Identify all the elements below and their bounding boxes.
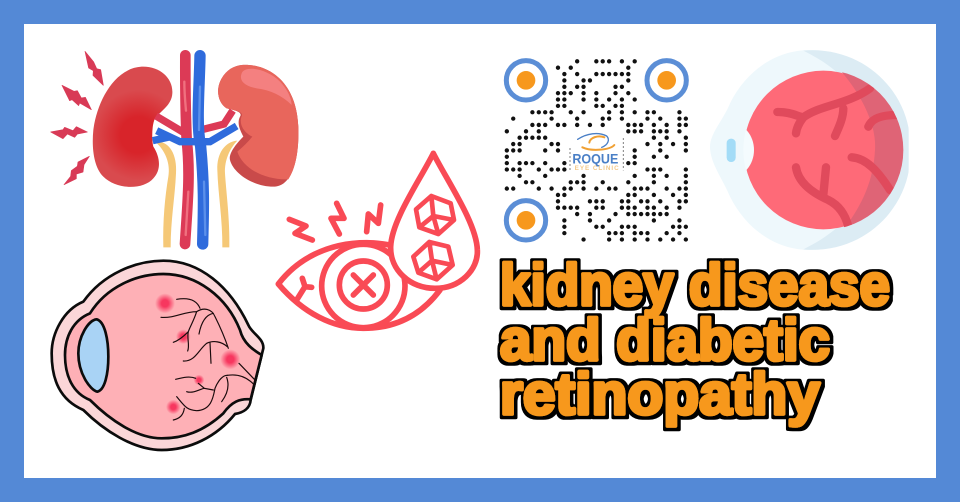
yellow ureters	[155, 141, 237, 247]
QR logo: Roque Eye Clinic: ROQUE	[572, 150, 618, 166]
left kidney	[93, 67, 172, 187]
right kidney	[218, 65, 298, 187]
QR finder centres	[517, 71, 676, 230]
icon: red retina eye	[706, 50, 913, 250]
white cornea notch	[744, 130, 754, 170]
eye vein	[297, 278, 312, 300]
title	[500, 253, 890, 427]
shaded sclera	[803, 50, 910, 250]
title line 3: retinopathy	[500, 362, 820, 427]
outer eye wall	[52, 261, 263, 450]
eye lids	[278, 243, 440, 328]
aorta	[185, 55, 189, 244]
vena cava	[198, 56, 203, 244]
sugar drop	[391, 153, 477, 288]
pain marks	[289, 203, 381, 240]
lens	[78, 319, 108, 392]
blood vessels	[777, 88, 897, 227]
QR code	[506, 61, 686, 240]
renal arteries	[156, 111, 233, 133]
pupil with cross	[339, 261, 387, 309]
icon: diabetic eye with sugar drop	[278, 153, 477, 328]
QR logo: Roque Eye Clinic: EYE CLINIC	[575, 165, 619, 172]
blood vessels	[161, 299, 254, 420]
iris	[322, 244, 405, 328]
title line 1: kidney disease	[500, 253, 890, 318]
icon: retinopathy eye cross-section	[52, 261, 263, 450]
retina	[744, 71, 903, 229]
sclera	[710, 50, 836, 250]
iris slit	[727, 139, 736, 162]
QR finder rings	[506, 61, 686, 240]
sugar cube top	[416, 196, 454, 234]
QR logo: Roque Eye Clinic	[570, 132, 623, 172]
sugar cube bottom	[413, 242, 453, 279]
retina shaded side	[842, 72, 904, 227]
QR dots	[507, 61, 686, 240]
icon: kidneys with pain bolts	[51, 51, 298, 247]
title line 2: and diabetic	[500, 308, 830, 373]
hemorrhage spots	[155, 293, 240, 414]
renal veins	[153, 126, 237, 142]
pain lightning bolts	[51, 51, 103, 185]
inner eye	[65, 274, 262, 438]
